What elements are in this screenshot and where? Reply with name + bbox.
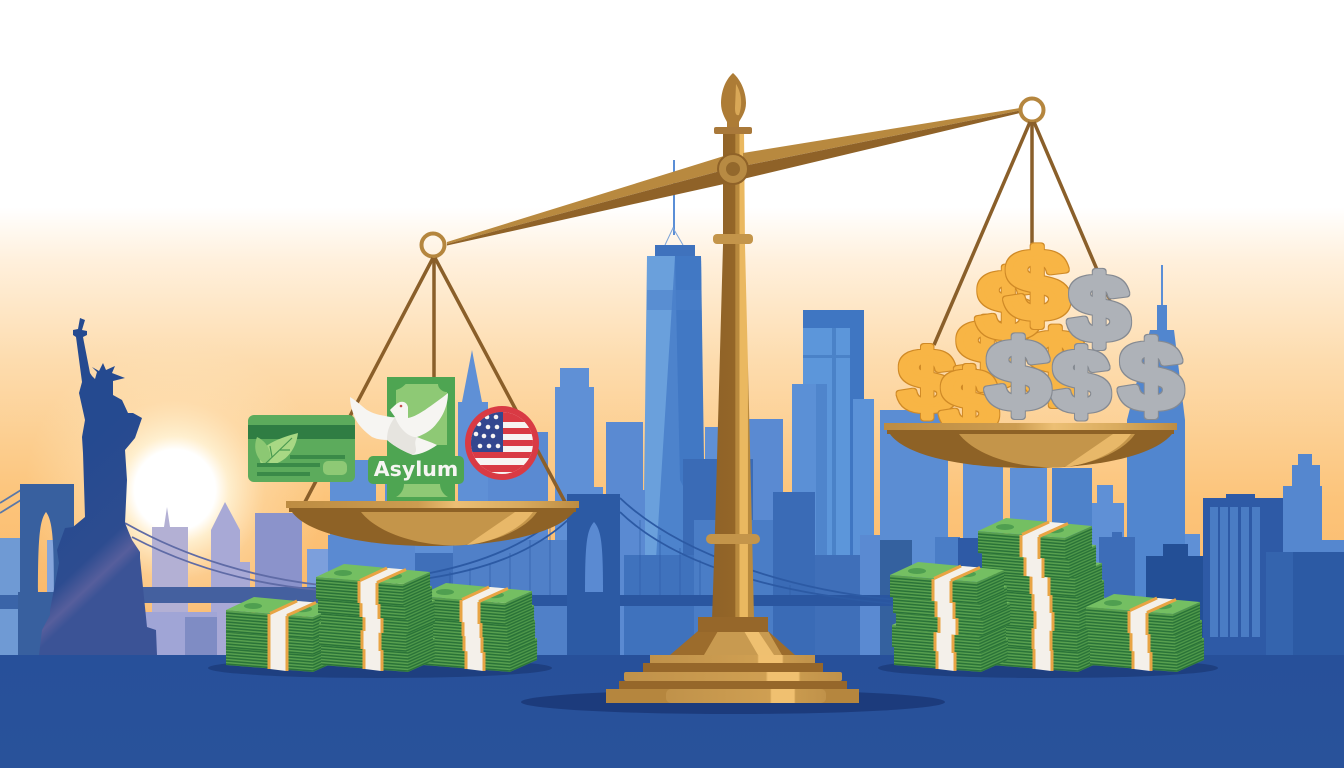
bridge cables [0,490,897,604]
top collar [714,127,752,134]
base shadow [521,690,945,714]
left ring [422,234,444,256]
silver dollars: $ [986,322,1050,430]
skyline: mid and dark buildings [328,459,1344,655]
stack: right 2 [978,518,1106,672]
low collar [706,534,760,544]
left pan [286,501,579,546]
skyline: right spire tower [1127,265,1185,655]
gold dollars: $ [1005,232,1069,340]
icon: green credit card with leaf [248,415,355,482]
skyline: far buildings [330,350,1344,655]
stack: right 3 [1086,594,1204,672]
pivot [718,154,748,184]
asylum label: Asylum [374,457,458,481]
stack: left 1 [226,597,340,672]
stack shadow left [208,658,552,678]
bridge tower right [567,494,620,655]
skyline: One World Trade tower [642,160,705,655]
skyline: faded buildings near the sun [0,502,331,655]
left pan chains [305,258,565,502]
gold dollars: $ [956,303,1018,409]
silver dollars: $ [1120,323,1182,430]
right pan chains [934,122,1110,345]
gold dollars [899,232,1086,449]
stack shadow right [878,658,1218,678]
stack: left 3 [418,583,537,672]
icon: white dove [350,393,448,455]
stack: right 1 [890,562,1010,672]
pile of dollar signs [899,232,1182,449]
silver dollars [986,258,1182,430]
ground [0,655,1344,768]
gold dollars: $ [941,353,997,449]
sun glow [25,340,325,640]
brooklyn bridge deck [0,587,897,609]
right pan [884,423,1177,468]
pedestal steps [606,617,859,703]
silver dollars: $ [1069,258,1129,360]
statue of liberty silhouette [39,318,157,655]
cash stacks left group [226,564,537,672]
icon: green bill [387,377,455,501]
gold dollars: $ [1024,313,1086,419]
balance beam [422,98,1044,256]
gold dollars: $ [899,333,955,429]
cash stacks right group [890,518,1204,672]
bridge tower left [18,484,74,655]
skyline: tall central-right tower [792,310,874,655]
post [712,130,754,620]
icon: american flag badge [465,406,539,480]
stack: left 2 [316,564,435,672]
mid collar [713,234,753,244]
silver dollars: $ [1053,333,1109,429]
gold dollars: $ [977,253,1039,359]
right ring [1020,98,1044,122]
scale stand [606,73,859,703]
finial [721,73,746,127]
